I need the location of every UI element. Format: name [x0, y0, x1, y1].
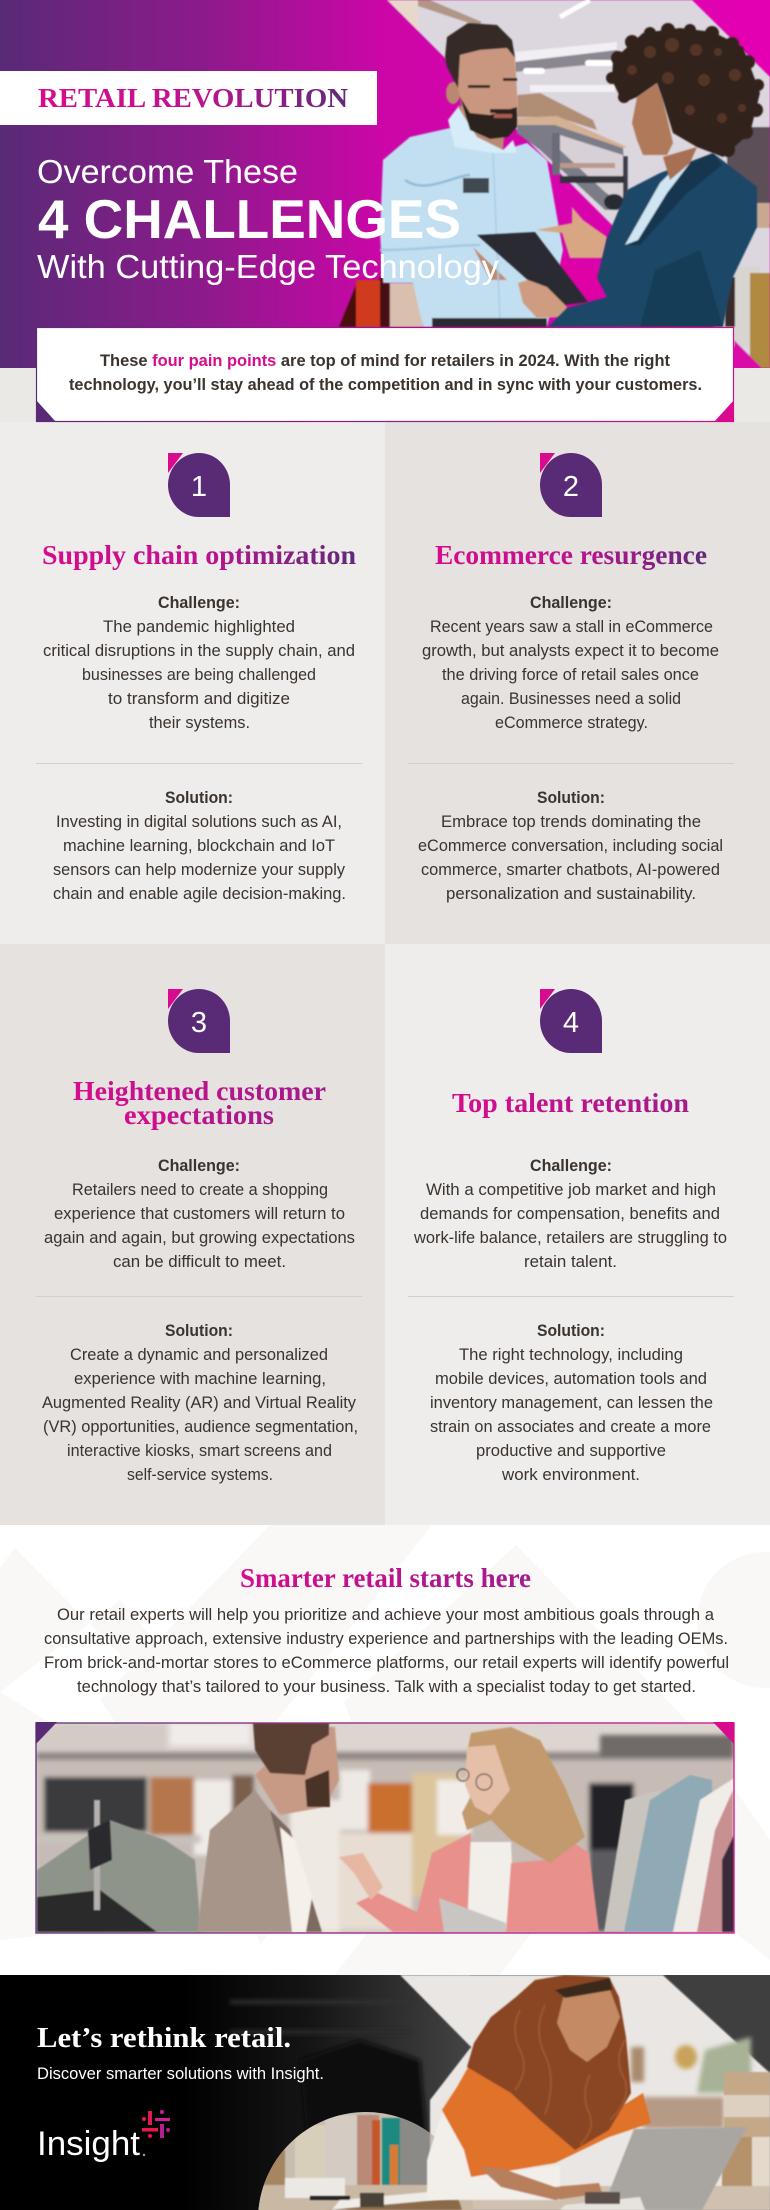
icon: number 2: 2	[563, 471, 579, 503]
footer photo: woman at laptop	[427, 1975, 747, 2210]
challenge text 2: Challenge:	[530, 594, 612, 612]
challenge text 3	[44, 1157, 355, 1271]
challenge text 1	[43, 594, 355, 732]
solution text 2: Embrace top trends dominating the	[441, 813, 701, 831]
paragraph: retail experts	[44, 1606, 729, 1696]
challenge text 3: again and again, but growing expectations	[44, 1229, 355, 1247]
heading 3: Heightened customer	[73, 1076, 326, 1106]
hero photo: businesswoman	[548, 23, 764, 327]
panel: footer call to action	[0, 1975, 770, 2210]
heading 2: Ecommerce resurgence	[435, 540, 707, 570]
footer photo: light room	[400, 1975, 770, 2210]
heading 1: Supply chain optimization	[42, 540, 356, 570]
hero title: 4 CHALLENGES	[38, 188, 461, 250]
band behind intro box	[0, 368, 770, 422]
solution text 4: productive and supportive	[476, 1442, 666, 1460]
challenge text 4: retain talent.	[524, 1253, 617, 1271]
solution text 1	[53, 789, 346, 903]
hero title: Overcome These	[37, 153, 298, 190]
solution text 2	[418, 789, 723, 903]
solution text 3: interactive kiosks, smart screens and	[67, 1442, 332, 1460]
solution text 3: Create a dynamic and personalized	[70, 1346, 328, 1364]
footer photo: boxes	[472, 2071, 770, 2210]
heading: smarter retail starts here: Smarter retail starts here	[240, 1563, 531, 1593]
challenge text 4: Challenge:	[530, 1157, 612, 1175]
card 3: heightened customer expectations	[36, 989, 362, 1484]
challenge text 4: demands for compensation, benefits and	[420, 1205, 720, 1223]
challenge text 4	[413, 1157, 727, 1271]
panel: challenge 4 background	[385, 944, 770, 1525]
challenge text 3: Retailers need to create a shopping	[72, 1181, 328, 1199]
panel: challenge 3 background	[0, 944, 385, 1525]
hero title	[37, 153, 500, 285]
icon: number 3	[168, 989, 230, 1053]
solution text 2: commerce, smarter chatbots, AI-powered	[421, 861, 720, 879]
panel: challenge 1 background	[0, 422, 385, 944]
solution text 1: chain and enable agile decision-making.	[53, 885, 346, 903]
intro box: technology, you’ll stay ahead of the competition and in sync with your customers.	[69, 375, 702, 394]
challenge text 1: The pandemic highlighted	[103, 618, 295, 636]
icon: number 2	[540, 453, 602, 517]
card 1: supply chain optimization	[36, 453, 362, 903]
icon: number 4: 4	[563, 1007, 579, 1039]
hero panel	[0, 0, 770, 368]
challenge text 2	[422, 594, 719, 732]
logo: Insight	[37, 2110, 170, 2163]
challenge text 2: again. Businesses need a solid	[461, 690, 681, 708]
footer photo: circular inset with clothes	[258, 2112, 474, 2210]
solution text 3: Augmented Reality (AR) and Virtual Reality	[42, 1394, 357, 1412]
colleague: woman in pink blazer	[339, 1727, 599, 1932]
challenge text 1: businesses are being challenged	[82, 666, 316, 684]
solution text 1: machine learning, blockchain and IoT	[63, 837, 335, 855]
solution text 4: Solution:	[537, 1322, 605, 1340]
curly hair	[606, 23, 764, 157]
solution text 3: experience with machine learning,	[74, 1370, 326, 1388]
text: discover smarter solutions: Discover smarter solutions with Insight.	[37, 2064, 324, 2083]
challenge text 2: eCommerce strategy.	[495, 714, 648, 732]
solution text 1: Solution:	[165, 789, 233, 807]
banner: retail revolution	[0, 71, 377, 125]
card 2: ecommerce resurgence	[408, 453, 734, 903]
solution text 4: mobile devices, automation tools and	[435, 1370, 707, 1388]
paragraph: retail experts: From brick-and-mortar stores to eCommerce platforms, our retail experts will identify powerful	[44, 1654, 729, 1672]
intro box	[36, 328, 734, 422]
solution text 2: eCommerce conversation, including social	[418, 837, 723, 855]
challenge text 3: experience that customers will return to	[54, 1205, 345, 1223]
solution text 4: strain on associates and create a more	[430, 1418, 711, 1436]
hero photo: left clothing and pillar	[338, 276, 600, 327]
solution text 3: Solution:	[165, 1322, 233, 1340]
challenge text 2: the driving force of retail sales once	[442, 666, 699, 684]
photo: retail colleagues in clothing store	[36, 1722, 734, 1933]
challenge text 1: Challenge:	[158, 594, 240, 612]
challenge text 4: work-life balance, retailers are struggling to	[413, 1229, 727, 1247]
heading 4: Top talent retention	[452, 1088, 689, 1118]
solution text 2: Solution:	[537, 789, 605, 807]
logo: Insight: Insight	[37, 2125, 141, 2163]
heading 3: expectations	[124, 1100, 274, 1130]
banner: retail revolution: RETAIL REVOLUTION	[38, 83, 349, 113]
icon: number 3: 3	[191, 1007, 207, 1039]
solution text 3	[42, 1322, 358, 1484]
challenge text 2: Recent years saw a stall in eCommerce	[430, 618, 713, 636]
solution text 1: sensors can help modernize your supply	[53, 861, 346, 879]
paragraph: retail experts: technology that’s tailored to your business. Talk with a specialist today to get started.	[77, 1678, 696, 1696]
intro box: These four pain points are top of mind for retailers in 2024. With the right	[100, 351, 670, 370]
challenge text 4: With a competitive job market and high	[426, 1181, 716, 1199]
card 4: top talent retention	[408, 989, 734, 1484]
hero photo: salesman	[380, 23, 563, 327]
dark clothing rack	[229, 1998, 429, 2132]
challenge text 3: Challenge:	[158, 1157, 240, 1175]
panel: challenge 2 background	[385, 422, 770, 944]
challenge text 1: to transform and digitize	[108, 690, 290, 708]
solution text 3: self-service systems.	[127, 1466, 273, 1484]
solution text 4: inventory management, can lessen the	[430, 1394, 713, 1412]
solution text 4	[430, 1322, 713, 1484]
icon: number 1	[168, 453, 230, 517]
challenge text 2: growth, but analysts expect it to become	[422, 642, 719, 660]
heading 3	[73, 1076, 326, 1130]
footer photo: papers and clipboard	[310, 2190, 462, 2210]
icon: number 1: 1	[191, 471, 207, 503]
solution text 3: (VR) opportunities, audience segmentation,	[43, 1418, 358, 1436]
icon: number 4	[540, 989, 602, 1053]
challenge text 1: their systems.	[149, 714, 250, 732]
colleague: man in tan blazer	[197, 1723, 339, 1932]
challenge text 3: can be difficult to meet.	[113, 1253, 286, 1271]
solution text 4: work environment.	[501, 1466, 640, 1484]
hero title: With Cutting-Edge Technology	[37, 248, 500, 285]
solution text 1: Investing in digital solutions such as AI,	[56, 813, 342, 831]
panel: smarter retail	[13, 1568, 735, 1934]
paragraph: retail experts: Our retail experts will help you prioritize and achieve your most ambitious goals through a	[57, 1606, 715, 1624]
solution text 4: The right technology, including	[459, 1346, 683, 1364]
paragraph: retail experts: consultative approach, extensive industry experience and partnerships with the leading OEMs.	[44, 1630, 728, 1648]
text: let's rethink retail: Let’s rethink retail.	[37, 2023, 291, 2054]
challenge text 1: critical disruptions in the supply chain, and	[43, 642, 355, 660]
hero photo: store background	[387, 0, 770, 368]
solution text 2: personalization and sustainability.	[446, 885, 696, 903]
hero photo: tablet and hands	[477, 207, 607, 318]
